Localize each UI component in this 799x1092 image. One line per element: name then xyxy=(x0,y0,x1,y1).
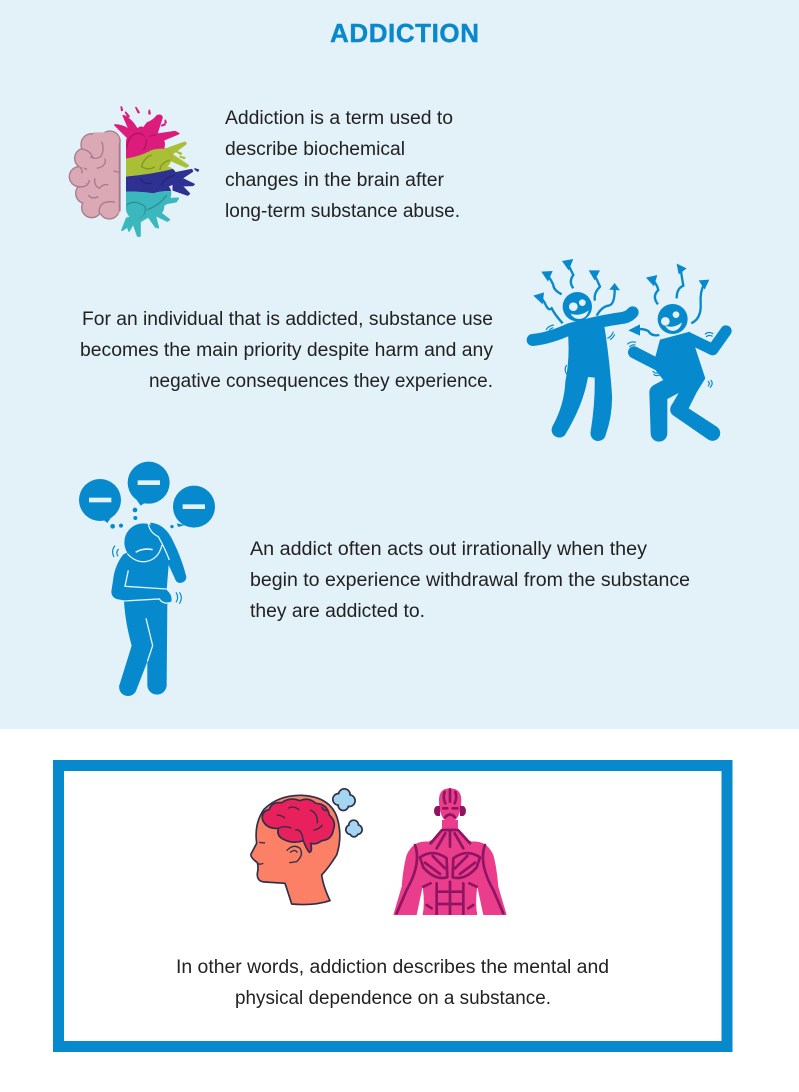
text block: withdrawal xyxy=(250,539,690,622)
thought clouds xyxy=(334,790,361,836)
text block: withdrawal: they are addicted to. xyxy=(250,601,425,622)
splash top magenta xyxy=(115,107,179,140)
text block: priority: negative consequences they experience. xyxy=(149,371,493,392)
text block: priority: For an individual that is addicted, substance use xyxy=(82,309,493,330)
splash bottom teal xyxy=(122,198,178,236)
left hemisphere xyxy=(70,132,119,218)
text block: conclusion: physical dependence on a substance. xyxy=(235,988,551,1009)
icon: muscular body xyxy=(393,788,507,915)
panel: conclusion frame xyxy=(58,766,727,1046)
figure right xyxy=(627,304,726,442)
icon: splattered brain xyxy=(70,107,198,236)
title: ADDICTION xyxy=(330,18,479,48)
text block: priority xyxy=(80,309,494,392)
squiggly arrows xyxy=(541,263,704,335)
icon: head with brain xyxy=(251,790,361,905)
text block: definition xyxy=(225,108,460,222)
text block: conclusion: In other words, addiction describes the mental and xyxy=(176,957,609,978)
text block: priority: becomes the main priority despite harm and any xyxy=(80,340,494,361)
text block: conclusion xyxy=(176,957,609,1009)
text block: definition: long-term substance abuse. xyxy=(225,201,460,222)
text block: definition: Addiction is a term used to xyxy=(225,108,453,129)
text block: withdrawal: begin to experience withdrawal from the substance xyxy=(250,570,690,591)
body xyxy=(111,523,186,696)
text block: definition: changes in the brain after xyxy=(225,170,445,191)
text block: definition: describe biochemical xyxy=(225,139,405,160)
icon: worried figure with thought bubbles xyxy=(79,462,215,696)
hemisphere colour bands xyxy=(126,132,176,218)
icon: two agitated figures xyxy=(533,259,726,442)
text block: withdrawal: An addict often acts out irrationally when they xyxy=(250,539,648,560)
background panel xyxy=(0,0,799,729)
thought bubbles xyxy=(79,462,215,529)
splash right green xyxy=(163,142,188,167)
splash right navy xyxy=(173,169,198,195)
figure left xyxy=(533,292,633,441)
